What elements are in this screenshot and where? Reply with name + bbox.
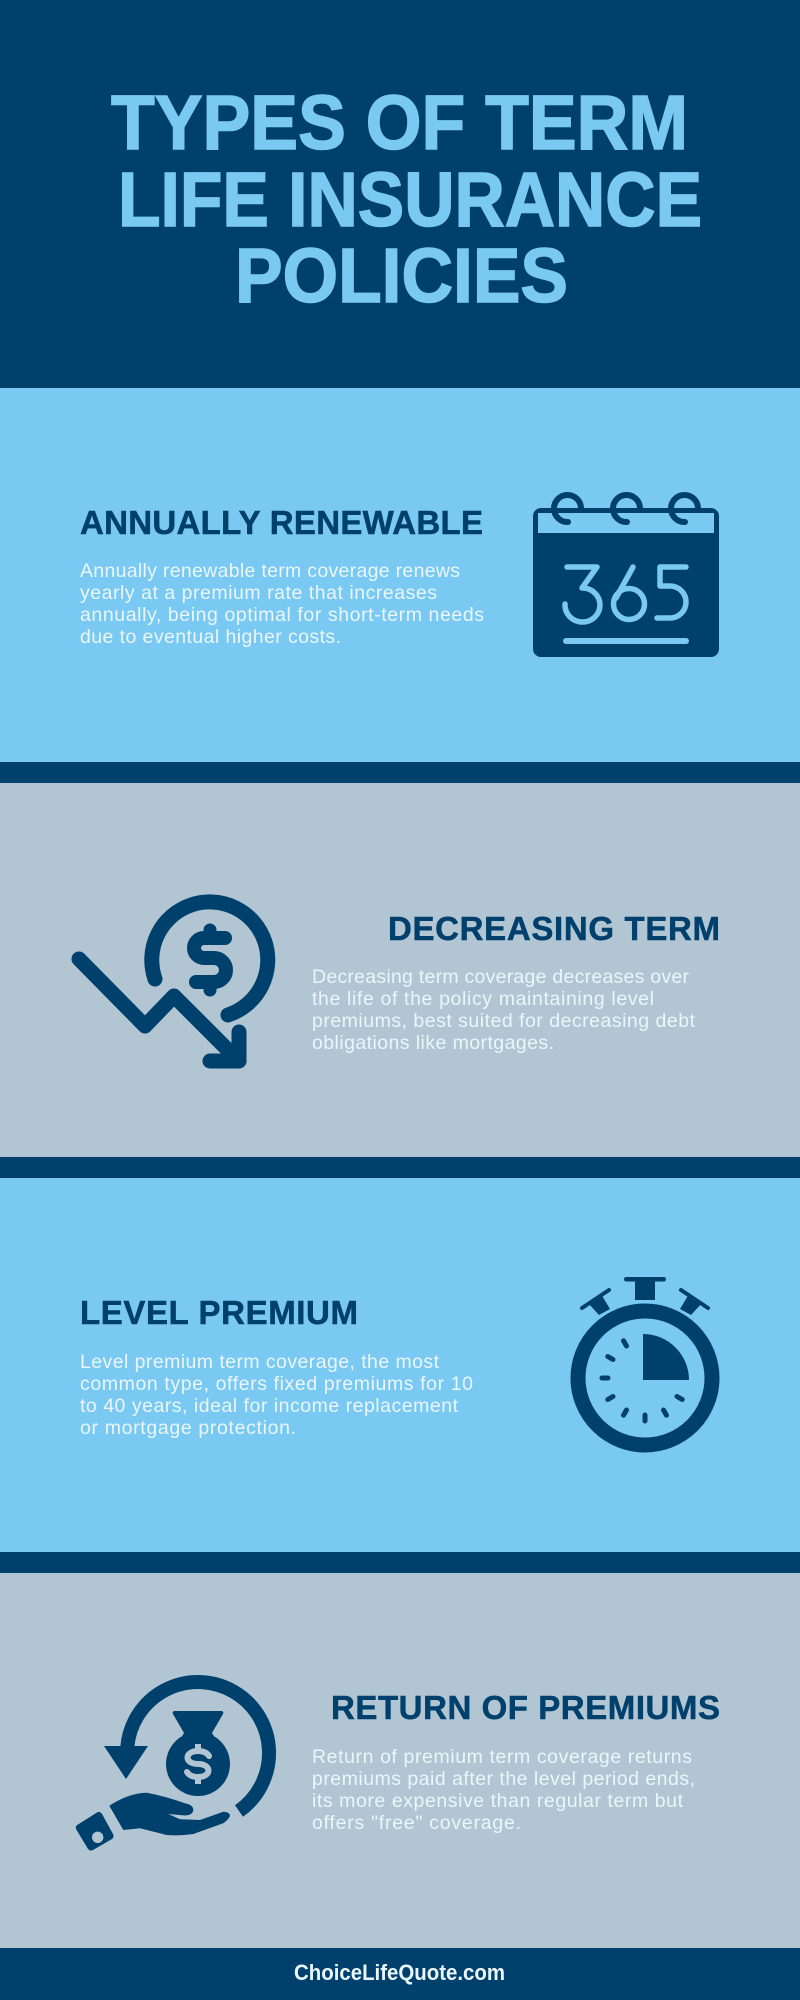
text block: level premium description: Level premium term coverage, the most	[80, 1351, 440, 1373]
icon: money bag returned to hand	[76, 1682, 269, 1851]
panel: level premium	[0, 1178, 800, 1552]
text block: return of premiums description: offers "free" coverage.	[312, 1812, 521, 1834]
text block: level premium description	[80, 1351, 473, 1439]
heading: level premium: LEVEL PREMIUM	[80, 1294, 358, 1331]
text block: decreasing term description: obligations like mortgages.	[312, 1032, 554, 1054]
text block: annually renewable description	[80, 560, 484, 648]
title: LIFE INSURANCE	[118, 157, 702, 243]
text block: return of premiums description: Return of premium term coverage returns	[312, 1746, 692, 1768]
text block: annually renewable description: annually, being optimal for short-term needs	[80, 604, 484, 626]
text block: level premium description: to 40 years, ideal for income replacement	[80, 1395, 459, 1417]
text block: annually renewable description: due to eventual higher costs.	[80, 626, 341, 648]
icon: stopwatch	[578, 1277, 712, 1445]
icon: calendar 365	[533, 495, 719, 657]
title: POLICIES	[235, 233, 568, 319]
text block: level premium description: or mortgage protection.	[80, 1417, 296, 1439]
text block: return of premiums description: its more expensive than regular term but	[312, 1790, 684, 1812]
footer	[0, 1948, 800, 2000]
text block: annually renewable description: yearly at a premium rate that increases	[80, 582, 437, 604]
text block: decreasing term description: Decreasing term coverage decreases over	[312, 966, 690, 988]
text block: annually renewable description: Annually renewable term coverage renews	[80, 560, 460, 582]
heading: decreasing term: DECREASING TERM	[388, 910, 720, 947]
text block: decreasing term description: the life of the policy maintaining level	[312, 988, 654, 1010]
panel: annually renewable	[0, 388, 800, 762]
heading: annually renewable: ANNUALLY RENEWABLE	[80, 504, 483, 541]
heading: return of premiums: RETURN OF PREMIUMS	[331, 1689, 720, 1726]
text block: decreasing term description: premiums, best suited for decreasing debt	[312, 1010, 696, 1032]
text block: return of premiums description: premiums paid after the level period ends,	[312, 1768, 695, 1790]
panel: decreasing term	[0, 783, 800, 1157]
text block: level premium description: common type, offers fixed premiums for 10	[80, 1373, 473, 1395]
icon: falling dollar chart	[79, 902, 268, 1061]
text block: decreasing term description	[312, 966, 696, 1054]
title: TYPES OF TERM	[111, 80, 688, 166]
footer website: ChoiceLifeQuote.com	[294, 1960, 505, 1985]
panel: return of premiums	[0, 1573, 800, 1948]
title	[111, 80, 702, 319]
text block: return of premiums description	[312, 1746, 695, 1834]
header panel	[0, 0, 800, 388]
